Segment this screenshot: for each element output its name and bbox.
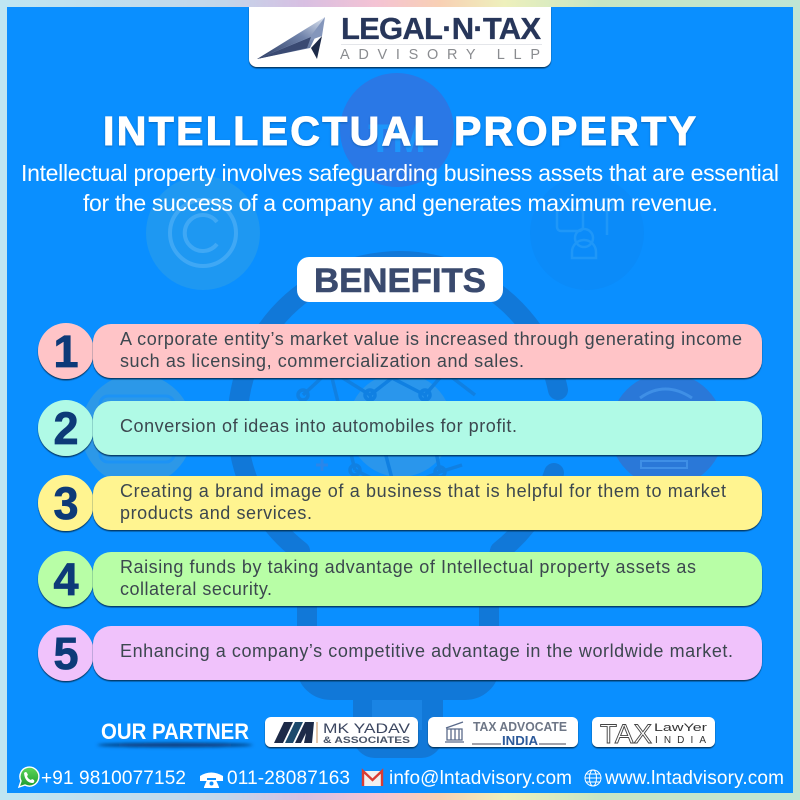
text pill 4: collateral security. xyxy=(120,579,272,599)
logo tagline: ADVISORY LLP xyxy=(340,47,540,63)
title: INTELLECTUAL PROPERTY xyxy=(103,108,696,154)
number badge 3 xyxy=(38,475,94,531)
number badge 2: 2 xyxy=(53,403,79,454)
partners strip xyxy=(97,717,715,749)
text pill 3: Creating a brand image of a business that is helpful for them to market xyxy=(120,481,726,501)
icon: globe xyxy=(585,770,601,786)
text pill 1: such as licensing, commercialization and sales. xyxy=(120,351,524,371)
benefits heading: BENEFITS xyxy=(314,262,486,300)
benefit row 3 xyxy=(38,475,762,531)
benefit row 5 xyxy=(38,625,762,681)
watermark: TM circle: TM xyxy=(368,117,426,161)
partner: Tax Advocate India: TAX ADVOCATE xyxy=(473,720,567,734)
benefit row 2 xyxy=(38,400,762,456)
intro text: Intellectual property involves safeguarding business assets that are essential xyxy=(21,160,779,186)
text pill 2 xyxy=(93,401,762,455)
background watermark icons xyxy=(81,73,724,758)
intro text xyxy=(21,160,779,216)
contact bar xyxy=(19,767,784,789)
landline number: 011-28087163 xyxy=(227,768,350,789)
benefit row 4 xyxy=(38,551,762,607)
text pill 3 xyxy=(93,476,762,530)
number badge 5 xyxy=(38,625,94,681)
partner: Tax Lawyer India: LawYer xyxy=(654,722,707,734)
watermark: copyright circle xyxy=(146,176,260,290)
text pill 4 xyxy=(93,552,762,606)
text pill 5 xyxy=(93,626,762,680)
partner: Tax Lawyer India: TAX xyxy=(600,719,652,749)
number badge 2 xyxy=(38,400,94,456)
watermark: person with key circle xyxy=(530,176,644,290)
logo wordmark: LEGAL·N·TAX xyxy=(341,11,541,46)
partner: MK Yadav xyxy=(265,717,418,747)
logo panel xyxy=(249,7,551,67)
watermark: left device circle xyxy=(81,374,193,486)
text pill 5: Enhancing a company’s competitive advantage in the worldwide market. xyxy=(120,641,733,661)
partner: Tax Advocate India xyxy=(428,717,578,748)
phone number: +91 9810077152 xyxy=(41,768,186,789)
text pill 4: Raising funds by taking advantage of Intellectual property assets as xyxy=(120,557,696,577)
website: www.lntadvisory.com xyxy=(604,768,784,789)
icon: paper plane logo xyxy=(257,17,325,59)
intro text: for the success of a company and generates maximum revenue. xyxy=(83,190,718,216)
icon: whatsapp xyxy=(19,767,39,787)
partner: Tax Advocate India: INDIA xyxy=(502,734,538,748)
partner: MK Yadav: & ASSOCIATES xyxy=(323,735,410,746)
partner: MK Yadav: MK YADAV xyxy=(323,720,411,736)
our partner label: OUR PARTNER xyxy=(101,719,249,744)
icon: mail xyxy=(362,771,383,786)
number badge 1 xyxy=(38,323,94,379)
icon: telephone xyxy=(200,772,223,788)
text pill 2: Conversion of ideas into automobiles for profit. xyxy=(120,416,517,436)
number badge 5: 5 xyxy=(53,628,79,679)
number badge 4 xyxy=(38,551,94,607)
number badge 3: 3 xyxy=(53,478,79,529)
text pill 1: A corporate entity’s market value is increased through generating income xyxy=(120,329,742,349)
text pill 3: products and services. xyxy=(120,503,312,523)
benefits heading xyxy=(297,257,503,302)
number badge 1: 1 xyxy=(53,326,79,377)
partner: Tax Lawyer India: INDIA xyxy=(655,735,706,746)
watermark: right monitor circle xyxy=(610,373,724,487)
email address: info@lntadvisory.com xyxy=(389,768,572,789)
watermark: light bulb xyxy=(237,261,558,758)
text pill 1 xyxy=(93,324,762,378)
benefit row 1 xyxy=(38,323,762,379)
number badge 4: 4 xyxy=(53,554,79,605)
watermark: TM circle xyxy=(340,73,454,187)
partner: Tax Lawyer India xyxy=(592,717,715,749)
